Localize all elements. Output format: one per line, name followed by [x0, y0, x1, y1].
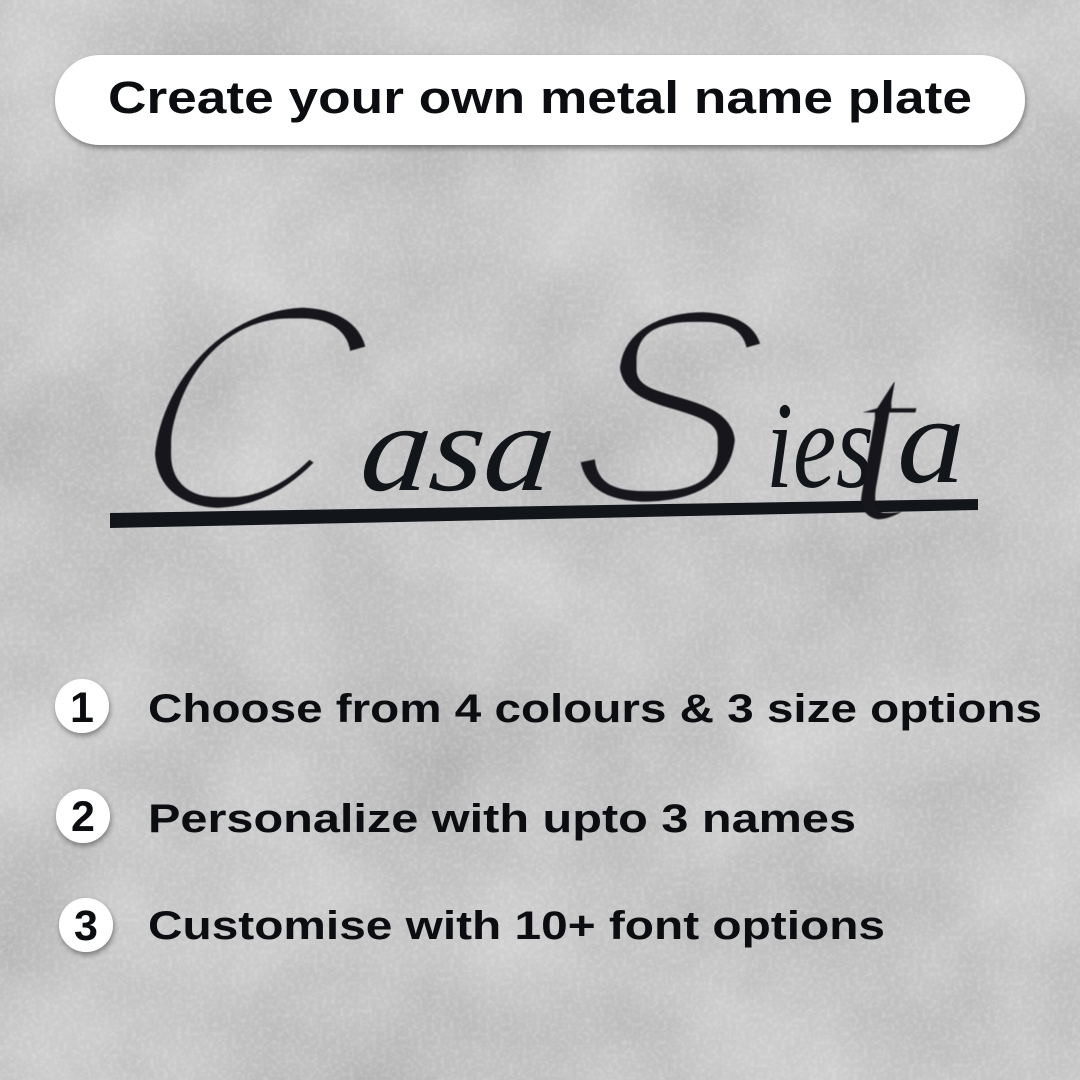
number badge 1: 1	[70, 684, 94, 732]
title banner	[55, 55, 1025, 145]
sign lettering: t: t	[846, 298, 921, 575]
metal name plate sign: Casa Siesta	[99, 239, 978, 575]
step 2	[56, 789, 856, 843]
number badge 2: 2	[71, 793, 95, 841]
step 1 text: Choose from 4 colours & 3 size options	[148, 687, 1042, 731]
number badge 3: 3	[74, 902, 98, 950]
number badge 1	[55, 679, 109, 733]
sign lettering: asa: asa	[355, 378, 562, 518]
step 2 text: Personalize with upto 3 names	[148, 797, 856, 841]
sign lettering: C: C	[99, 239, 403, 575]
sign lettering: a: a	[897, 372, 965, 509]
step 1	[55, 679, 1042, 733]
number badge 2	[56, 789, 110, 843]
step 3	[59, 898, 885, 952]
title banner: Create your own metal name plate	[108, 72, 972, 123]
number badge 3	[59, 898, 113, 952]
sign lettering: ies: ies	[766, 377, 874, 514]
step 3 text: Customise with 10+ font options	[148, 904, 885, 948]
sign base bar	[110, 499, 978, 528]
sign lettering: S: S	[551, 249, 784, 565]
